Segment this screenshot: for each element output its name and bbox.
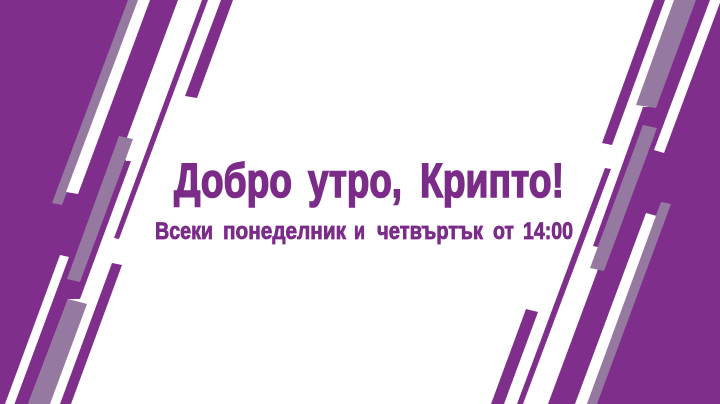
title [174,155,564,208]
title: Добро [174,155,292,208]
panel: right diagonal stripes [491,0,720,404]
title: утро, [308,155,402,208]
subtitle: schedule: Всеки [155,218,213,245]
panel: left diagonal stripes [0,0,233,404]
subtitle: schedule: понеделник [223,218,347,245]
subtitle: schedule: от [493,218,514,245]
title: Крипто! [420,155,564,208]
subtitle: schedule [155,218,573,245]
subtitle: schedule: четвъртък [377,218,484,245]
subtitle: schedule: и [354,218,365,245]
subtitle: schedule: 14:00 [523,218,573,245]
